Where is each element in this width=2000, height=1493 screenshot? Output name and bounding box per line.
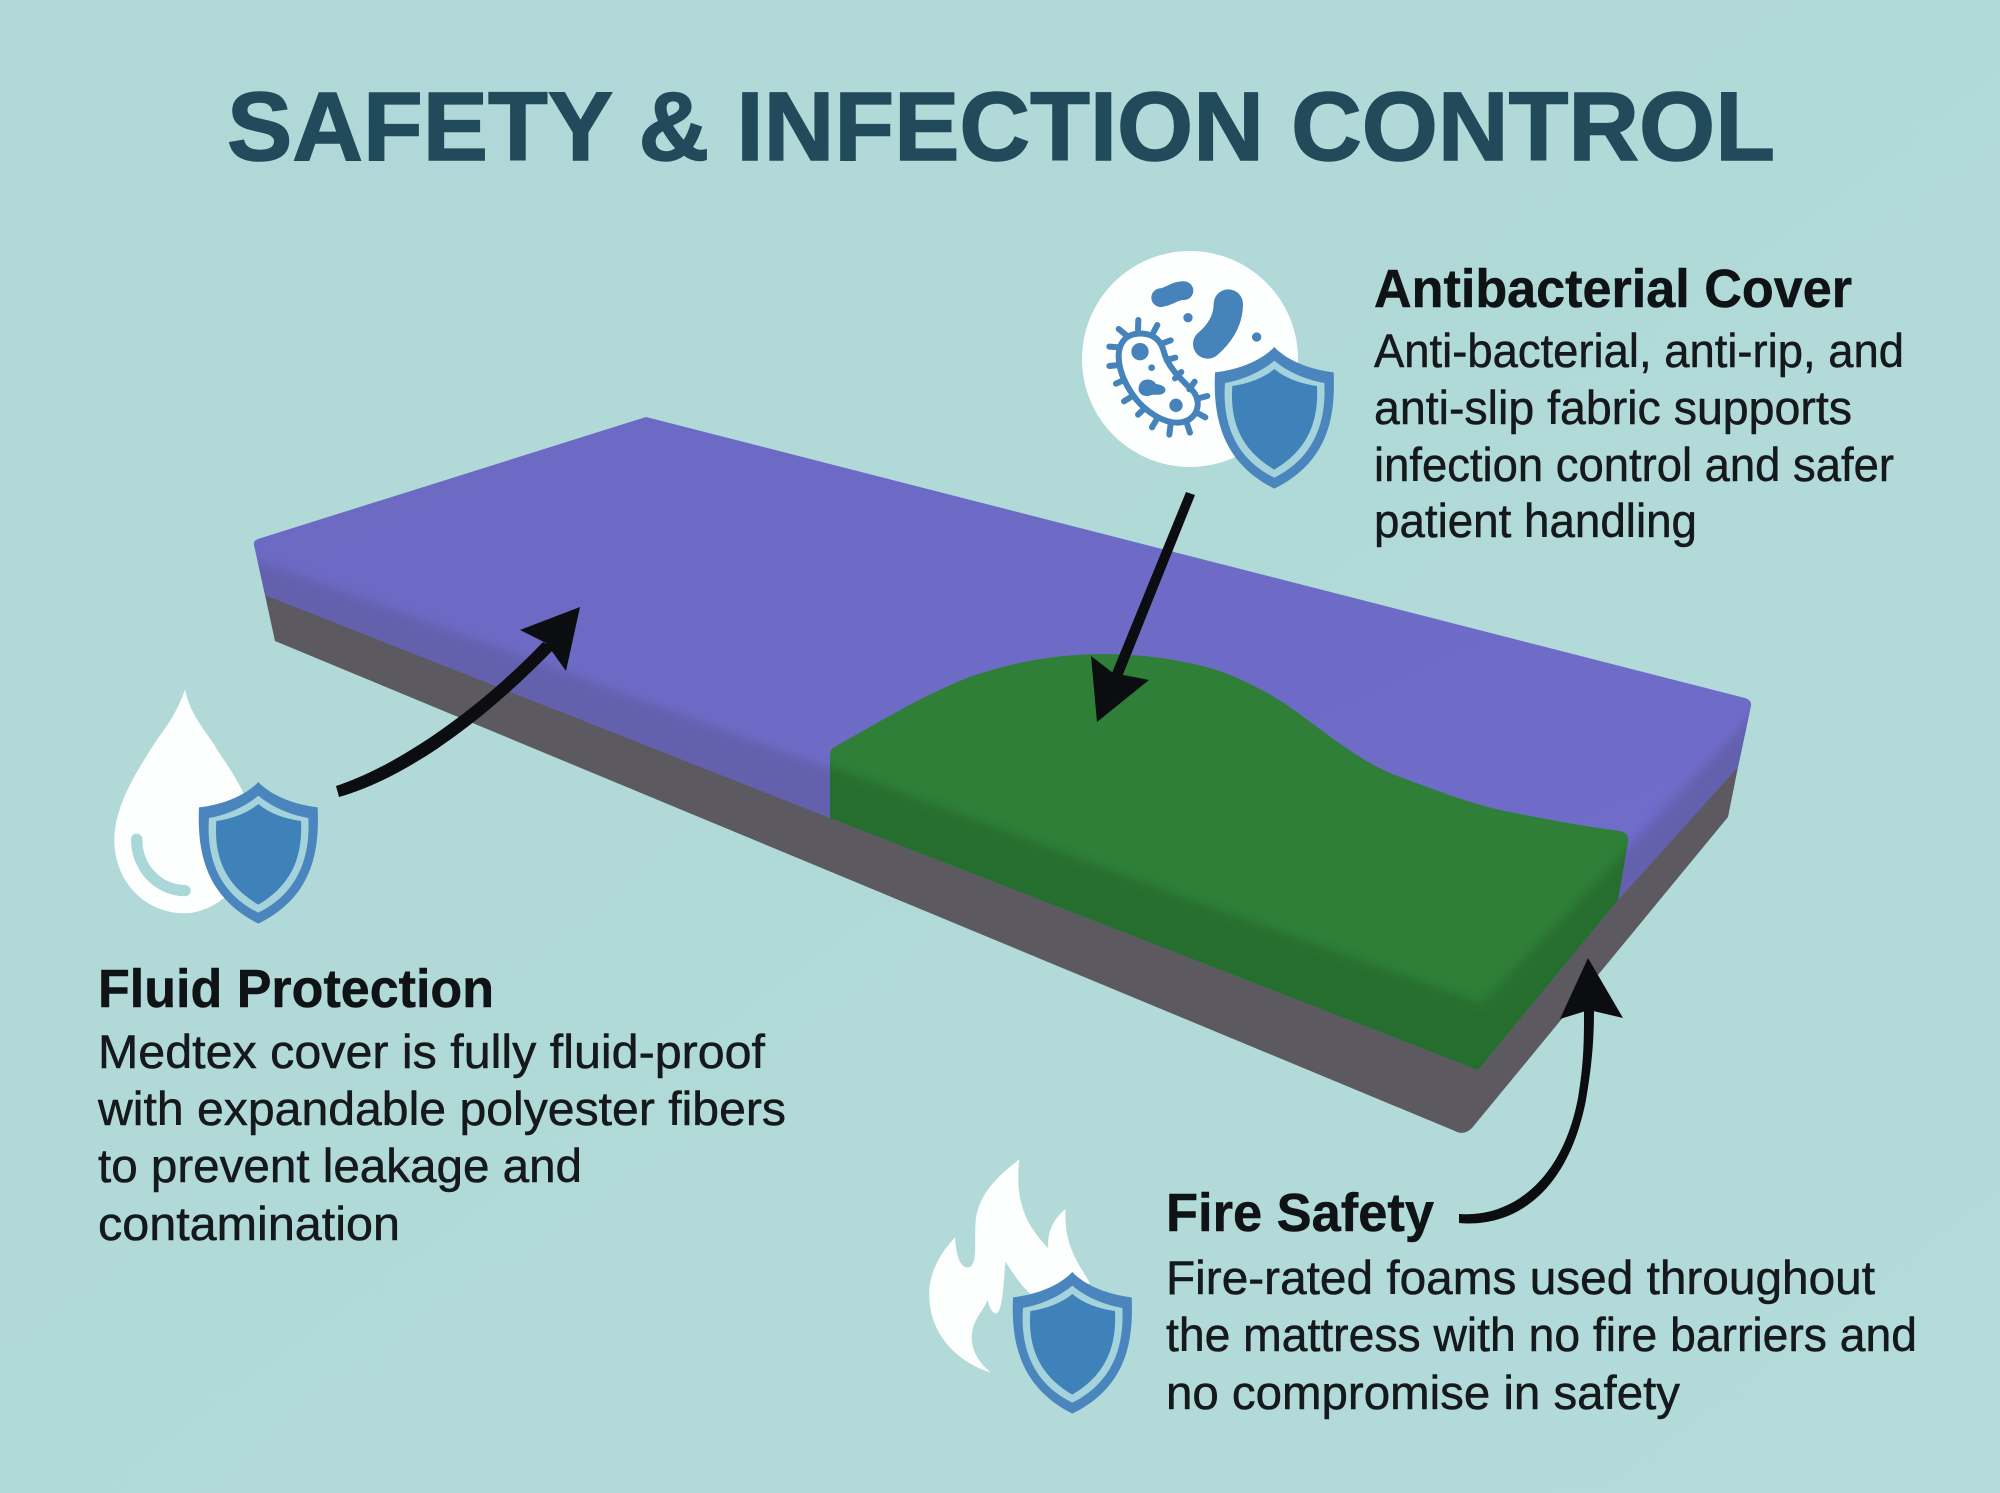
icon: water drop with shield [114,689,318,924]
text block: antibacterial cover [1374,259,1904,547]
green zone [820,640,1640,1090]
flame [929,1159,1090,1373]
mattress purple cover [240,400,1770,1100]
text block: antibacterial cover: anti-slip fabric supports [1374,381,1852,434]
arrow: fire safety to foam base [1459,958,1623,1223]
bacteria glyphs [1109,291,1261,435]
text block: fire safety [1166,1183,1917,1419]
text block: fluid protection [97,959,786,1250]
text block: antibacterial cover: Anti-bacterial, anti-rip, and [1374,324,1904,377]
title: SAFETY & INFECTION CONTROL [227,72,1775,181]
text block: fluid protection: Fluid Protection [98,959,494,1019]
shield [1013,1272,1132,1414]
text block: fire safety: Fire-rated foams used throughout [1166,1251,1875,1304]
arrow: fluid protection to cover [336,607,580,797]
shield [1215,347,1334,489]
text block: antibacterial cover: patient handling [1374,494,1697,547]
text block: fire safety: the mattress with no fire barriers and [1166,1308,1917,1361]
text block: antibacterial cover: Antibacterial Cover [1374,259,1852,319]
text block: fluid protection: with expandable polyester fibers [97,1082,786,1135]
text block: fluid protection: Medtex cover is fully fluid-proof [98,1025,766,1078]
text block: fire safety: no compromise in safety [1166,1366,1680,1419]
mattress grey foam base [265,595,1738,1133]
icon: flame with shield [929,1159,1132,1414]
text block: fluid protection: to prevent leakage and [98,1139,582,1192]
text block: fluid protection: contamination [98,1197,400,1250]
text block: fire safety: Fire Safety [1166,1183,1434,1243]
mattress illustration [240,400,1770,1133]
text block: antibacterial cover: infection control and safer [1374,438,1894,491]
icon: bacteria with shield [1082,251,1334,489]
arrow: antibacterial cover to green zone [1091,492,1195,722]
shield [199,782,318,924]
white circle [1082,251,1298,467]
water drop [114,689,252,913]
